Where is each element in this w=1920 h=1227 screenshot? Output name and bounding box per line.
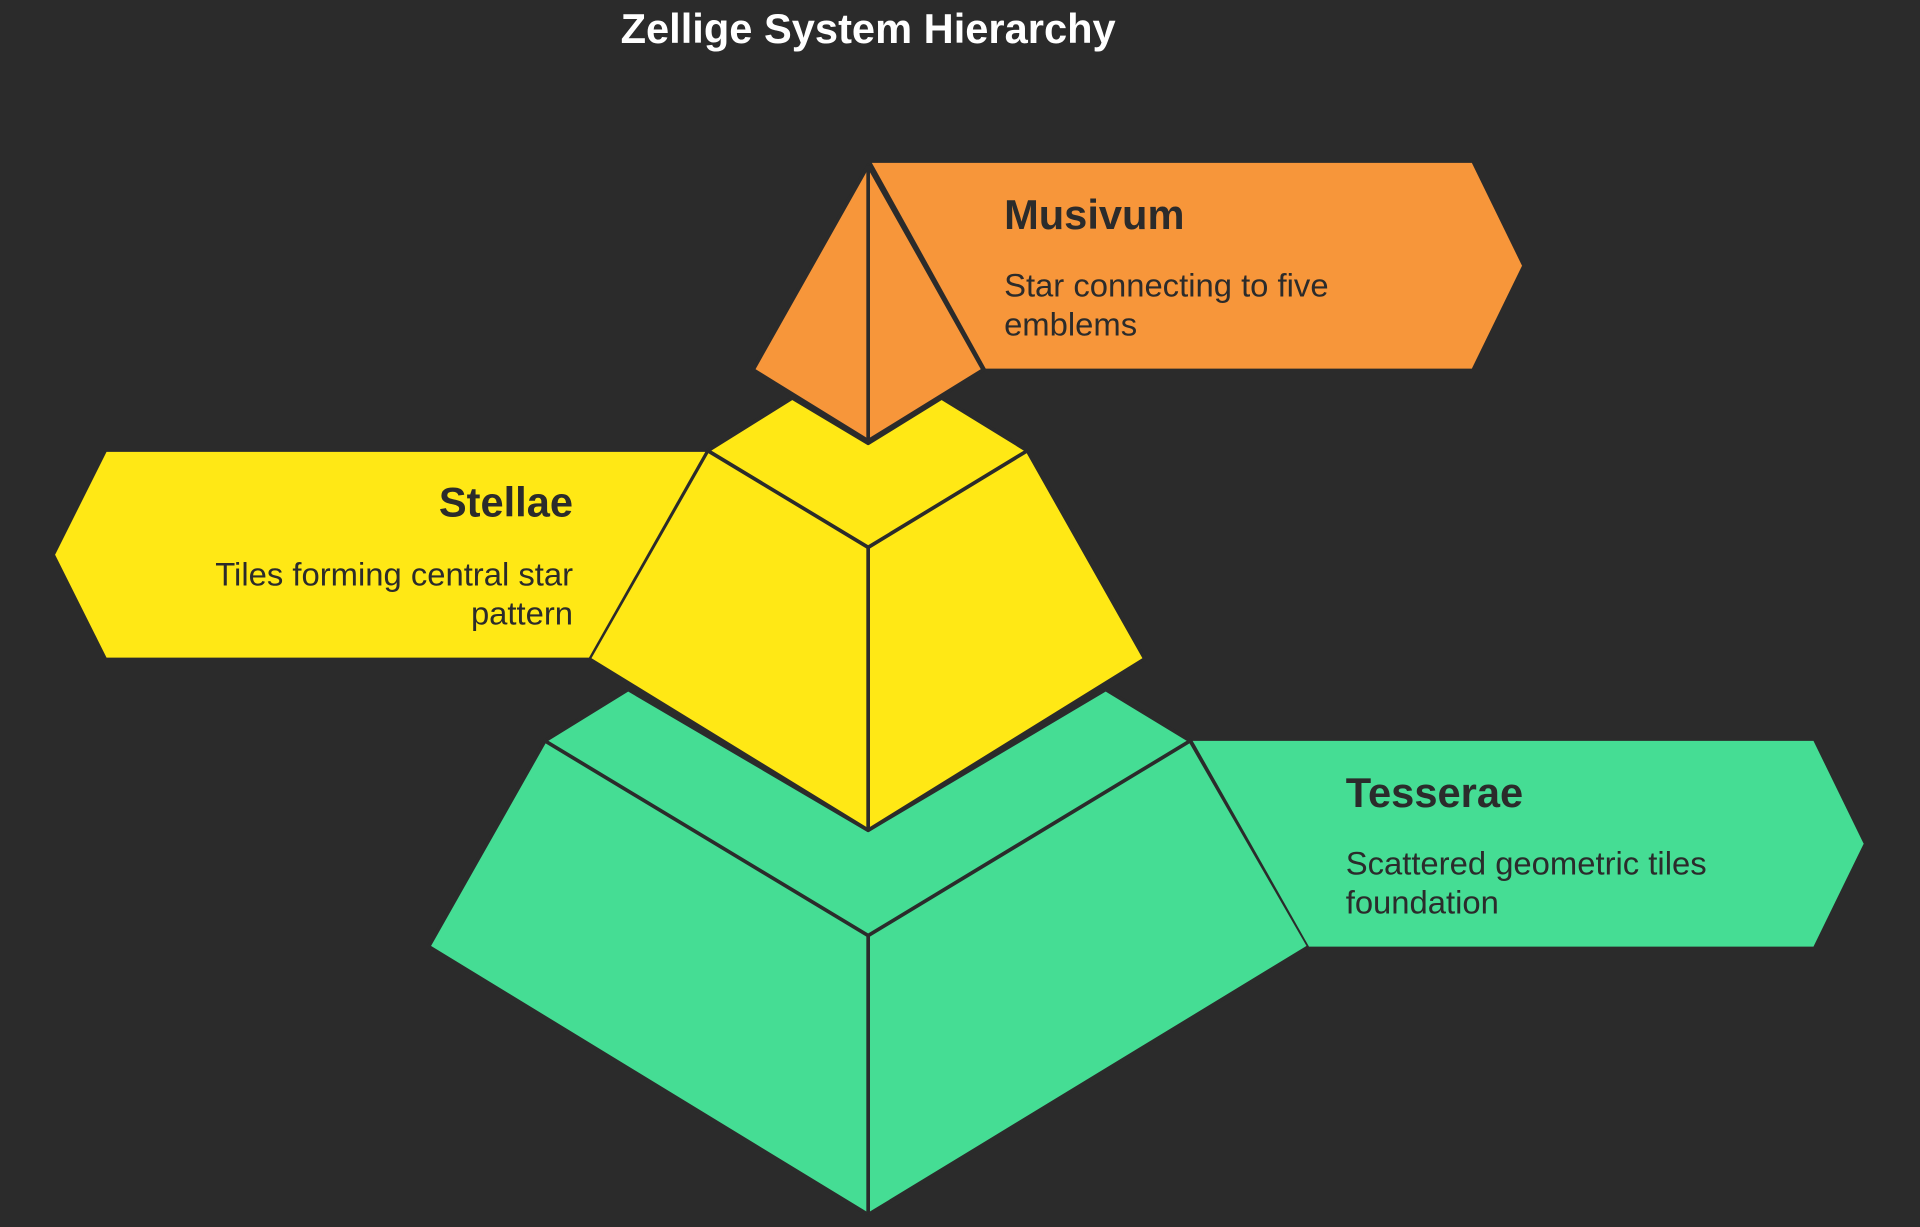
panel: Stellae label: Tiles forming central star bbox=[215, 555, 573, 592]
panel: Musivum label: emblems bbox=[1004, 306, 1137, 343]
panel: Tesserae label bbox=[1193, 741, 1864, 947]
panel: Musivum label: Star connecting to five bbox=[1004, 266, 1329, 303]
title: Zellige System Hierarchy bbox=[621, 5, 1116, 52]
tier: Stellae (middle) bbox=[589, 398, 1145, 830]
panel: Tesserae label: foundation bbox=[1346, 884, 1499, 921]
panel: Tesserae label: Scattered geometric tiles bbox=[1346, 844, 1707, 881]
panel: Stellae label: Stellae bbox=[439, 479, 573, 526]
panel: Tesserae label: Tesserae bbox=[1346, 769, 1523, 816]
tier: Musivum (apex) bbox=[753, 165, 983, 441]
panel: Musivum label bbox=[872, 163, 1522, 369]
tier: Tesserae (base) bbox=[429, 689, 1309, 1215]
panel: Musivum label: Musivum bbox=[1004, 191, 1184, 238]
panel: Stellae label: pattern bbox=[471, 595, 573, 632]
panel: Stellae label bbox=[55, 452, 705, 658]
